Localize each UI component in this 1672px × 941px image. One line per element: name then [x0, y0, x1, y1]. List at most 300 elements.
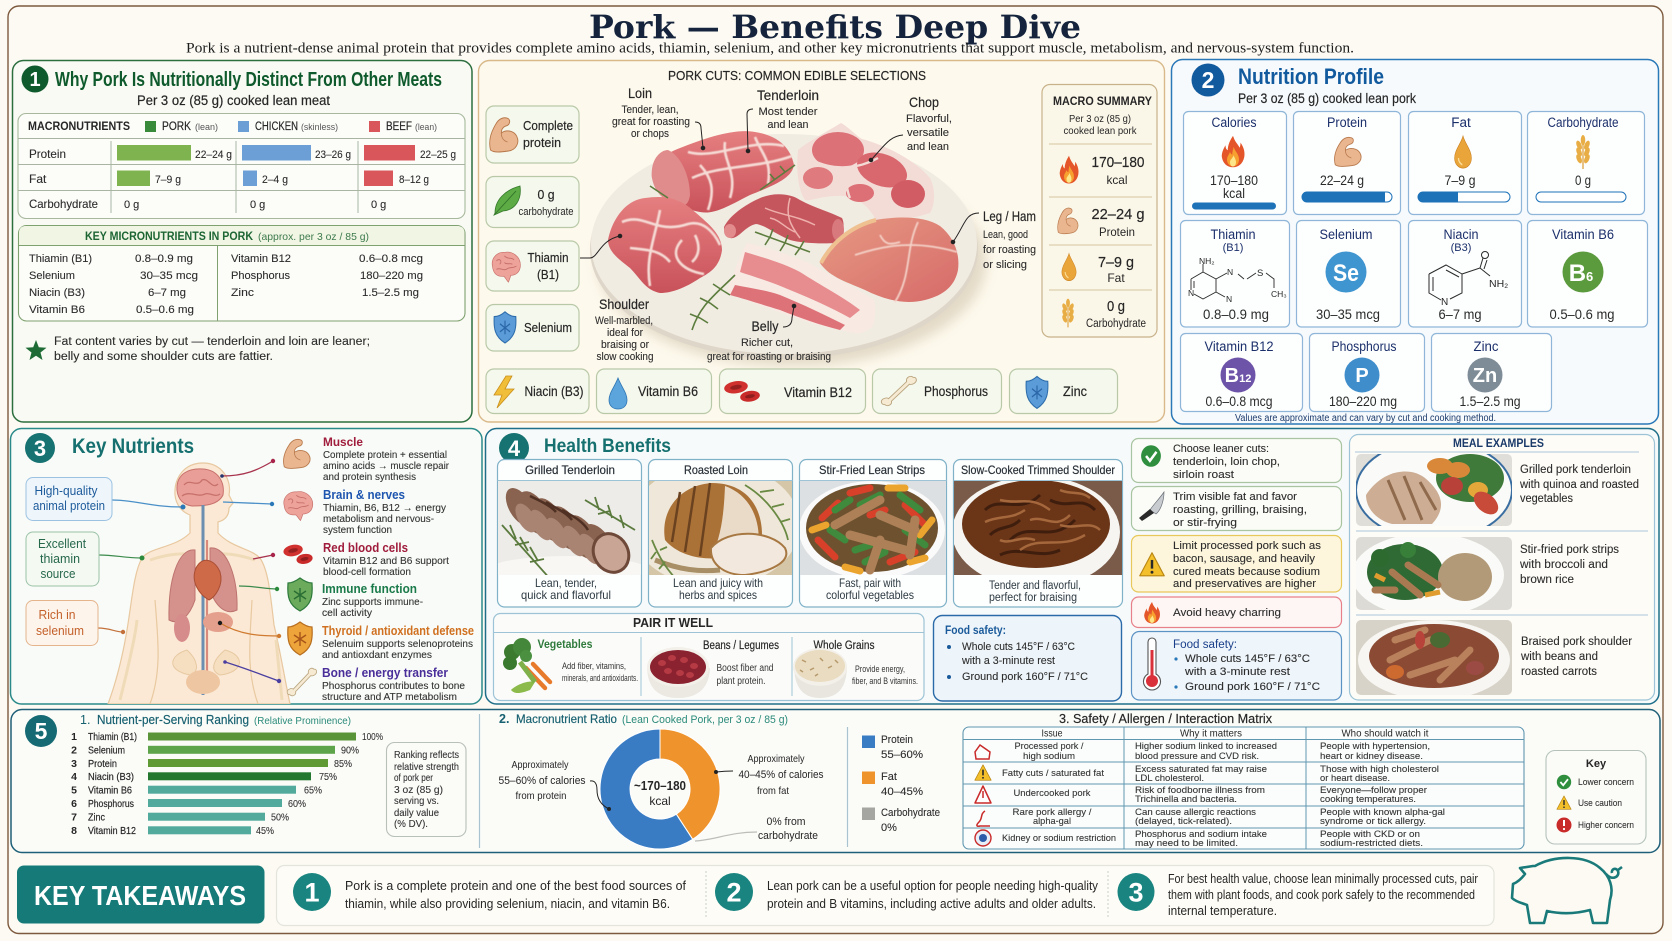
chart: macronutrient ratio donut: (Lean Cooked Pork, per 3 oz / 85 g): [622, 714, 788, 726]
footnote: Values are approximate and can vary by cut and cooking method.: [1235, 413, 1496, 424]
number badge 2: [1192, 64, 1224, 96]
chart: nutrient ranking: (Relative Prominence): [254, 715, 351, 727]
card: zinc: Zn: [1473, 365, 1497, 387]
label: loin: Tender, lean,: [622, 104, 678, 116]
chip: vitamin b6: Vitamin B6: [638, 384, 698, 399]
donut legend: [862, 734, 940, 834]
callout: rich in selenium: [26, 600, 125, 646]
callout: high-quality protein: [26, 478, 186, 520]
meat: small tenderloin: [724, 194, 844, 243]
chart: nutrient ranking: [71, 713, 383, 837]
takeaway 2: [715, 873, 1098, 911]
label: belly: great for roasting or braising: [707, 351, 831, 363]
takeaway 2: 2: [726, 878, 742, 908]
card: selenium: [1296, 220, 1400, 327]
takeaway 3: 3: [1128, 878, 1144, 908]
macro: protein: [1058, 206, 1144, 239]
meal examples: MEAL EXAMPLES: [1453, 438, 1544, 450]
matrix row: undercooked pork: Risk of foodborne illness from: [1135, 785, 1265, 796]
chart: nutrient ranking: 3: [71, 758, 77, 770]
leader lines: [580, 109, 979, 327]
meal text 1: with quinoa and roasted: [1519, 479, 1639, 491]
takeaway 3: For best health value, choose lean minimally processed cuts, pair: [1168, 872, 1478, 886]
meal: braised shoulder plate: [1356, 620, 1512, 700]
meal text 1: Grilled pork tenderloin: [1520, 464, 1631, 476]
meat: chop: [797, 123, 934, 221]
number badge 4: [499, 433, 529, 463]
benefit: red blood cells: blood-cell formation: [323, 567, 411, 578]
label: belly: Richer cut,: [741, 337, 793, 349]
concern key: Higher concern: [1578, 820, 1634, 831]
food card: slow-cooked trimmed shoulder: perfect for braising: [989, 592, 1077, 604]
label: leg and ham: or slicing: [983, 259, 1027, 271]
concern key: Use caution: [1578, 798, 1622, 809]
key micronutrients table: KEY MICRONUTRIENTS IN PORK: [85, 231, 254, 243]
card: niacin with molecule: NH₂: [1489, 278, 1508, 290]
benefit: bone and energy transfer: [287, 666, 465, 703]
safety matrix: [963, 712, 1524, 849]
food card: slow-cooked trimmed shoulder: [952, 460, 1122, 607]
benefit: thyroid and antioxidant defense: [288, 622, 474, 661]
card: niacin with molecule: N: [1441, 297, 1448, 308]
callout: thiamin source: [26, 532, 144, 586]
matrix row: fatty cuts: [975, 764, 1439, 784]
macro: carbohydrate: Carbohydrate: [1086, 318, 1146, 330]
macronutrient comparison table: 22–25 g: [420, 149, 456, 161]
macronutrient comparison table: MACRONUTRIENTS: [28, 121, 130, 133]
matrix row: fatty cuts: Excess saturated fat may raise: [1135, 764, 1267, 775]
card: calories: Calories: [1212, 115, 1257, 130]
chart: nutrient ranking: 50%: [271, 812, 289, 824]
pairing: whole grains: [793, 640, 918, 698]
macro summary card: [1042, 84, 1157, 337]
macronutrient comparison table: PORK: [162, 121, 191, 133]
matrix row: processed pork: People with hypertension,: [1320, 741, 1430, 752]
food safety box: Whole cuts 145°F / 63°C: [962, 641, 1075, 653]
macro: fat: Fat: [1107, 271, 1125, 285]
macronutrient comparison table: (lean): [195, 122, 218, 133]
macronutrient comparison table: 0 g: [371, 199, 386, 211]
callout: thiamin source: Excellent: [38, 537, 86, 551]
pairing: whole grains: Whole Grains: [814, 640, 875, 652]
chip: phosphorus: [872, 369, 1002, 414]
chart: nutrient ranking: Nutrient-per-Serving Ranking: [97, 713, 249, 727]
benefit: immune function: cell activity: [322, 608, 372, 619]
chart: nutrient ranking: Vitamin B6: [88, 784, 132, 796]
macro summary card: cooked lean pork: [1064, 126, 1137, 137]
food safety box: Ground pork 160°F / 71°C: [962, 671, 1088, 683]
ranking note: Ranking reflects: [394, 749, 459, 761]
card: zinc: 1.5–2.5 mg: [1460, 394, 1520, 409]
panel 1: why pork is distinct: [12, 60, 472, 422]
food safety box: Food safety:: [945, 625, 1006, 637]
pairing: whole grains: fiber, and B vitamins.: [852, 676, 918, 687]
key micronutrients table: 30–35 mcg: [140, 270, 198, 282]
chart: nutrient ranking: Selenium: [88, 744, 125, 756]
benefit: red blood cells: Vitamin B12 and B6 support: [323, 556, 449, 567]
chart: nutrient ranking: 60%: [288, 798, 306, 810]
benefit: red blood cells: [282, 541, 449, 578]
donut legend: Carbohydrate: [881, 807, 940, 819]
key micronutrients table: 1.5–2.5 mg: [362, 287, 419, 299]
star note: [26, 336, 370, 363]
matrix row: fatty cuts: Fatty cuts / saturated fat: [1002, 768, 1104, 779]
macronutrient comparison table: 2–4 g: [262, 174, 288, 186]
benefit: muscle: and protein synthesis: [323, 472, 416, 483]
macro: fat: 7–9 g: [1098, 254, 1134, 271]
matrix row: kidney or sodium restriction: [975, 829, 1423, 849]
food safety box: with a 3-minute rest: [961, 655, 1055, 667]
chart: nutrient ranking: Phosphorus: [88, 798, 134, 810]
matrix row: rare allergy: Rare pork allergy /: [1012, 807, 1092, 818]
benefit: brain and nerves: [284, 488, 446, 536]
matrix row: fatty cuts: Those with high cholesterol: [1320, 764, 1439, 775]
key micronutrients table: (approx. per 3 oz / 85 g): [258, 231, 369, 243]
benefit: thyroid and antioxidant defense: Thyroid / antioxidant defense: [322, 624, 474, 638]
pairing: vegetables: minerals, and antioxidants.: [562, 673, 638, 684]
card: thiamin with molecule: (B1): [1223, 242, 1243, 254]
card: selenium: Se: [1333, 260, 1359, 287]
key micronutrients table: Vitamin B12: [231, 253, 291, 265]
benefit: brain and nerves: metabolism and nervous-: [323, 514, 434, 525]
chart: macronutrient ratio donut: ~170–180: [634, 779, 686, 793]
subtitle: Pork is a nutrient-dense animal protein that provides complete amino acids, thiamin, selenium, and other key micronutrients that support muscle, metabolism, and nervous-system function.: [186, 40, 1354, 56]
panel 4 heading: Health Benefits: [544, 435, 671, 457]
title: Pork — Benefits Deep Dive: [589, 8, 1081, 46]
macronutrient comparison table: BEEF: [386, 121, 412, 133]
icon: pig outline: [1512, 858, 1622, 923]
pork cuts heading: PORK CUTS: COMMON EDIBLE SELECTIONS: [668, 69, 926, 83]
key micronutrients table: [18, 226, 465, 321]
meat: loin: [652, 131, 794, 213]
matrix row: fatty cuts: or heart disease.: [1320, 773, 1390, 784]
benefit: thyroid and antioxidant defense: and antioxdant enzymes: [322, 650, 432, 661]
callout: thiamin source: source: [40, 567, 76, 581]
chart: nutrient ranking: 7: [71, 812, 77, 824]
macronutrient comparison table: Fat: [29, 172, 47, 186]
panel 5: data section: [11, 710, 1660, 852]
chart: macronutrient ratio donut: [498, 712, 824, 849]
key takeaways banner: [17, 866, 264, 924]
chart: nutrient ranking: 6: [71, 798, 77, 810]
chip: zero carbohydrate: [486, 176, 579, 228]
card: protein: [1294, 112, 1400, 214]
chart: macronutrient ratio donut: 0% from: [766, 816, 806, 828]
label: loin: Loin: [628, 85, 652, 101]
panel 2 subheading: Per 3 oz (85 g) cooked lean pork: [1238, 91, 1416, 106]
matrix row: undercooked pork: [975, 785, 1427, 805]
tip: avoid charring: [1132, 597, 1342, 628]
label: shoulder: [595, 296, 654, 363]
chip: selenium: [486, 304, 579, 351]
chart: macronutrient ratio donut: Approximately: [748, 753, 805, 765]
chart: nutrient ranking: 4: [71, 771, 77, 783]
macro: carbohydrate: 0 g: [1107, 298, 1125, 315]
macro: calories: 170–180: [1092, 154, 1144, 171]
key micronutrients table: 180–220 mg: [360, 270, 423, 282]
tip: choose leaner cuts: [1132, 438, 1342, 482]
label: chop: Chop: [909, 94, 939, 110]
panel 2 heading: Nutrition Profile: [1238, 64, 1384, 89]
tip: avoid charring: Avoid heavy charring: [1173, 607, 1281, 619]
label: shoulder: slow cooking: [596, 351, 654, 363]
chip: complete protein: protein: [523, 135, 561, 150]
number badge 1: [22, 66, 48, 92]
macro: protein: 22–24 g: [1092, 206, 1144, 223]
tip: limit processed pork: Limit processed pork such as: [1173, 540, 1322, 552]
chip: niacin: [486, 369, 589, 414]
macronutrient comparison table: 0 g: [250, 199, 265, 211]
macronutrient comparison table: 22–24 g: [195, 149, 232, 161]
label: leg and ham: Leg / Ham: [983, 208, 1036, 224]
card: phosphorus: 180–220 mg: [1329, 394, 1397, 409]
tip: choose leaner cuts: sirloin roast: [1173, 469, 1234, 481]
number badge 5: [25, 715, 57, 747]
macronutrient comparison table: Protein: [29, 147, 66, 161]
number badge 4: 4: [508, 436, 521, 461]
takeaway 2: protein and B vitamins, including active adults and older adults.: [767, 896, 1096, 911]
card: carbohydrate: 0 g: [1575, 173, 1591, 188]
chip: complete protein: [486, 106, 579, 163]
card: zinc: [1432, 334, 1552, 412]
safety matrix: Who should watch it: [1342, 728, 1429, 740]
benefit: brain and nerves: Thiamin, B6, B12 → energy: [323, 503, 446, 514]
meat: ham: [820, 218, 958, 302]
chart: macronutrient ratio donut: from protein: [516, 790, 567, 802]
label: tenderloin: and lean: [768, 119, 808, 131]
card: thiamin with molecule: Thiamin: [1210, 227, 1256, 242]
pairing: vegetables: [503, 637, 638, 693]
card: vitamin b6: Vitamin B6: [1552, 227, 1614, 242]
callout: thiamin source: thiamin: [40, 552, 80, 566]
matrix row: processed pork: high sodium: [1023, 751, 1075, 762]
matrix row: processed pork: blood pressure and CVD risk.: [1135, 751, 1259, 762]
number badge 5: 5: [35, 718, 48, 744]
ranking note: relative strength: [394, 761, 459, 773]
pairing: beans and legumes: Boost fiber and: [716, 663, 774, 674]
chip: thiamin: (B1): [537, 267, 559, 282]
meal text 3: Braised pork shoulder: [1521, 636, 1632, 648]
pair it well: [494, 614, 924, 700]
chip: phosphorus: Phosphorus: [924, 384, 988, 399]
meal text 2: Stir-fried pork strips: [1520, 544, 1619, 556]
donut legend: 55–60%: [881, 749, 923, 761]
chart: nutrient ranking: 5: [71, 784, 77, 796]
label: tenderloin: [757, 87, 819, 131]
chart: nutrient ranking: Niacin (B3): [88, 771, 134, 783]
number badge 1: 1: [29, 69, 41, 91]
connector lines: [218, 459, 281, 683]
card: vitamin b12: [1180, 334, 1302, 412]
tip: limit processed pork: cured meats because sodium: [1173, 566, 1320, 578]
chart: macronutrient ratio donut: Macronutrient Ratio: [516, 712, 617, 726]
tip: trim visible fat: or stir-frying: [1173, 517, 1237, 529]
macro: carbohydrate: [1061, 298, 1146, 330]
chart: nutrient ranking: 2: [71, 744, 77, 756]
pairing: whole grains: Provide energy,: [855, 664, 905, 675]
chip: zinc: [1010, 369, 1118, 414]
label: shoulder: Shoulder: [599, 296, 649, 312]
benefit: bone and energy transfer: structure and ATP metabolism: [322, 692, 457, 703]
tip: food safety temperatures: [1132, 632, 1342, 700]
card: niacin with molecule: (B3): [1451, 242, 1471, 254]
takeaway 1: thiamin, while also providing selenium, niacin, and vitamin B6.: [345, 896, 670, 911]
number badge 2: 2: [1202, 67, 1214, 93]
matrix row: kidney or sodium restriction: People with CKD or on: [1320, 829, 1420, 840]
macronutrient comparison table: 7–9 g: [155, 174, 181, 186]
label: belly: [707, 318, 831, 363]
key micronutrients table: Phosphorus: [231, 270, 290, 282]
ranking note: serving vs.: [394, 795, 439, 807]
macro summary card: Per 3 oz (85 g): [1069, 114, 1131, 125]
meal text 3: roasted carrots: [1521, 666, 1597, 678]
donut legend: Protein: [881, 734, 913, 746]
safety matrix: Why it matters: [1180, 728, 1242, 740]
donut legend: 40–45%: [881, 786, 923, 798]
tip: food safety temperatures: Ground pork 160°F / 71°C: [1185, 681, 1320, 693]
chip: zero carbohydrate: 0 g: [538, 187, 554, 202]
food card: grilled tenderloin: [488, 460, 648, 607]
key micronutrients table: 0.8–0.9 mg: [135, 253, 193, 265]
chart: nutrient ranking: 8: [71, 825, 77, 837]
label: tenderloin: Tenderloin: [757, 87, 819, 103]
pair it well: PAIR IT WELL: [633, 615, 713, 630]
chart: nutrient ranking: 1.: [80, 713, 90, 727]
key takeaways banner: KEY TAKEAWAYS: [34, 880, 246, 911]
meal: stir-fried strips plate: [1356, 537, 1512, 610]
macronutrient comparison table: 23–26 g: [315, 149, 351, 161]
meal: grilled tenderloin plate: [1356, 454, 1512, 526]
tip: trim visible fat: [1132, 486, 1342, 530]
card: niacin with molecule: 6–7 mg: [1438, 307, 1482, 322]
card: zinc: Zinc: [1474, 339, 1499, 354]
takeaway 3: [1118, 872, 1478, 918]
food card: stir-fried lean strips: Fast, pair with: [839, 576, 901, 590]
chip: selenium: Selenium: [524, 320, 572, 335]
takeaways strip: [276, 866, 1494, 926]
benefit: immune function: [288, 578, 423, 619]
card: phosphorus: Phosphorus: [1332, 339, 1397, 354]
tip: limit processed pork: and preservatives are higher: [1173, 578, 1316, 590]
card: niacin with molecule: Niacin: [1444, 227, 1478, 242]
pairing: beans and legumes: plant protein.: [716, 676, 766, 687]
card: vitamin b6: [1528, 220, 1648, 327]
meal text 2: brown rice: [1520, 574, 1574, 586]
meat: belly: [727, 243, 875, 333]
plate with cuts of meat: [590, 123, 986, 366]
macronutrient comparison table: CHICKEN: [255, 121, 298, 133]
tip: limit processed pork: bacon, sausage, and heavily: [1173, 553, 1316, 565]
ranking note: of pork per: [394, 772, 433, 784]
card: thiamin with molecule: S: [1257, 268, 1263, 279]
macro summary card: MACRO SUMMARY: [1053, 96, 1152, 108]
matrix row: rare allergy: Can cause allergic reactions: [1135, 807, 1256, 818]
rosemary sprigs: [650, 165, 810, 330]
card: phosphorus: [1310, 334, 1424, 412]
meal text 1: [1519, 464, 1639, 505]
label: chop: versatile: [907, 127, 949, 139]
key micronutrients table: Niacin (B3): [29, 287, 85, 299]
chart: nutrient ranking: Vitamin B12: [88, 825, 136, 837]
chart: nutrient ranking: 100%: [362, 731, 383, 743]
macronutrient comparison table: (skinless): [301, 122, 338, 133]
tip: choose leaner cuts: tenderloin, loin chop,: [1173, 456, 1280, 468]
chart: macronutrient ratio donut: carbohydrate: [758, 830, 818, 842]
food safety box: [934, 616, 1122, 701]
takeaway 3: them with plant foods, and cook pork safely to the recommended: [1168, 888, 1475, 902]
chart: nutrient ranking: 85%: [334, 758, 352, 770]
card: calories: [1184, 112, 1286, 214]
chart: macronutrient ratio donut: kcal: [649, 794, 671, 808]
label: leg and ham: Lean, good: [983, 229, 1028, 241]
takeaway 2: Lean pork can be a useful option for people needing high-quality: [767, 878, 1098, 893]
food card: grilled tenderloin: Grilled Tenderloin: [525, 463, 615, 477]
ranking note: 3 oz (85 g): [394, 784, 443, 796]
chart: macronutrient ratio donut: 55–60% of calories: [498, 775, 586, 787]
panel 2: nutrition profile: [1172, 60, 1658, 424]
key micronutrients table: Selenium: [29, 270, 75, 282]
callout: rich in selenium: Rich in: [38, 608, 76, 622]
ranking note: (% DV).: [394, 818, 428, 830]
food card: stir-fried lean strips: Stir-Fried Lean Strips: [819, 463, 925, 477]
card: calories: 170–180: [1210, 173, 1258, 188]
card: carbohydrate: [1528, 112, 1644, 214]
chip: complete protein: Complete: [523, 118, 573, 133]
takeaway 1: Pork is a complete protein and one of the best food sources of: [345, 878, 686, 893]
tip: trim visible fat: roasting, grilling, braising,: [1173, 504, 1307, 516]
card: vitamin b12: B12: [1225, 365, 1251, 387]
donut legend: 0%: [881, 822, 897, 834]
concern key: Key: [1586, 758, 1607, 770]
key micronutrients table: Vitamin B6: [29, 304, 85, 316]
tip: trim visible fat: Trim visible fat and favor: [1173, 491, 1297, 503]
matrix row: rare allergy: [977, 807, 1445, 827]
macro: protein: Protein: [1099, 225, 1135, 239]
chip: thiamin: Thiamin: [528, 250, 568, 265]
panel 1 heading: Why Pork Is Nutritionally Distinct From Other Meats: [55, 69, 442, 91]
matrix row: rare allergy: syndrome or tick allergy.: [1320, 816, 1426, 827]
concern key: [1546, 750, 1646, 844]
card: fat: 7–9 g: [1444, 173, 1476, 188]
macronutrient comparison table: Carbohydrate: [29, 197, 98, 211]
meal text 1: vegetables: [1520, 493, 1573, 505]
matrix row: kidney or sodium restriction: may need to be limited.: [1135, 838, 1238, 849]
card: vitamin b6: 0.5–0.6 mg: [1550, 307, 1614, 322]
tip: food safety temperatures: with a 3-minute rest: [1184, 666, 1290, 678]
card: fat: [1408, 112, 1522, 214]
matrix row: processed pork: Higher sodium linked to increased: [1135, 741, 1277, 752]
label: tenderloin: Most tender: [758, 106, 818, 118]
pairing: beans and legumes: Beans / Legumes: [703, 640, 779, 652]
card: phosphorus: P: [1355, 365, 1369, 387]
card: thiamin with molecule: [1180, 220, 1290, 327]
number badge 3: 3: [34, 436, 46, 461]
matrix row: rare allergy: (delayed, tick-related).: [1135, 816, 1232, 827]
card: fat: Fat: [1451, 115, 1471, 130]
macronutrient comparison table: (lean): [415, 122, 437, 133]
callout: high-quality protein: animal protein: [33, 499, 105, 513]
star note: belly and some shoulder cuts are fattier.: [54, 351, 273, 363]
chart: nutrient ranking: Thiamin (B1): [88, 731, 137, 743]
callout: high-quality protein: High-quality: [34, 484, 98, 498]
label: belly: Belly: [752, 318, 778, 334]
donut legend: Fat: [881, 771, 897, 783]
benefit: thyroid and antioxidant defense: Selenuim supports selenoproteins: [322, 639, 473, 650]
chip: vitamin b12: [720, 369, 866, 414]
ranking note: daily value: [394, 807, 439, 819]
callout: rich in selenium: selenium: [36, 624, 84, 638]
food card: grilled tenderloin: Lean, tender,: [535, 576, 597, 590]
